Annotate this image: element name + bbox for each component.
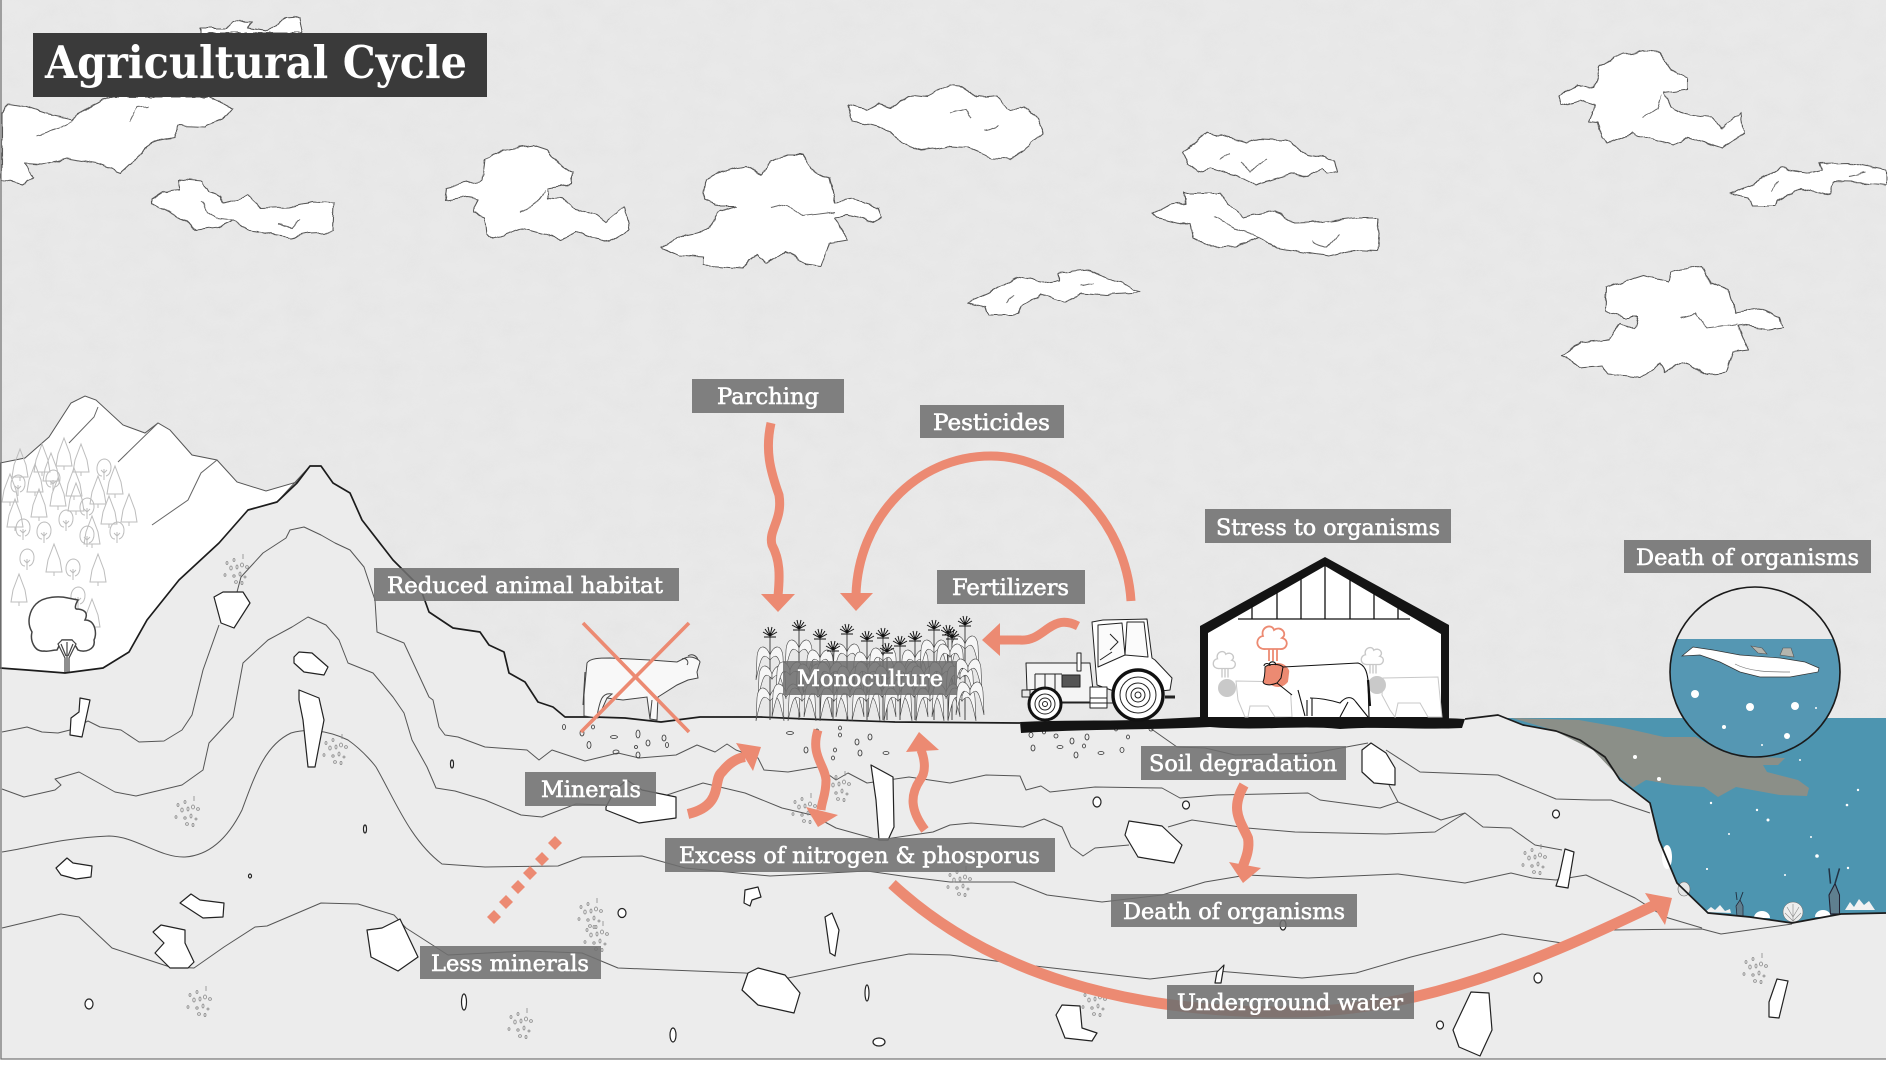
label: less minerals [420, 946, 601, 979]
cow in field [583, 655, 700, 720]
label: monoculture [783, 661, 957, 695]
mineral speckle clusters [175, 554, 1767, 1039]
seabed organisms [1662, 845, 1875, 922]
arrow: nitrogen leaching down [806, 730, 838, 827]
label: death of organisms in the sea [1624, 540, 1871, 573]
label: reduced animal habitat: Reduced animal habitat [387, 574, 663, 599]
rocks [56, 592, 1788, 1056]
label: monoculture: Monoculture [797, 667, 943, 692]
label: less minerals: Less minerals [431, 952, 589, 977]
arrow: fertilizers [982, 622, 1078, 656]
label: excess of nitrogen and phosphorus: Excess of nitrogen & phosporus [679, 844, 1040, 869]
label: parching: Parching [717, 385, 819, 410]
arrow: underground water [892, 884, 1672, 1012]
label: fertilizers: Fertilizers [952, 576, 1069, 601]
inset circle: dead fish in the water [1670, 587, 1840, 758]
barn and tractor foundation [1020, 717, 1465, 733]
arrow: parching [761, 423, 795, 612]
stressed cow [1263, 662, 1370, 717]
label: soil degradation [1141, 746, 1346, 780]
stress steam [1257, 626, 1287, 661]
ground line [0, 466, 1886, 923]
tractor [1022, 619, 1175, 720]
white mountains with forest [0, 396, 310, 673]
label: pesticides: Pesticides [933, 411, 1050, 436]
big tree [29, 597, 95, 673]
faded cows and steam [1213, 648, 1442, 717]
label: stress to organisms: Stress to organisms [1216, 516, 1440, 541]
fish [1682, 646, 1819, 677]
label: soil degradation: Soil degradation [1149, 752, 1337, 777]
clouds [2, 17, 1886, 378]
label: fertilizers [937, 570, 1085, 604]
conifer trees [2, 438, 137, 631]
label: pesticides [920, 405, 1064, 438]
crossed-out mark [581, 623, 689, 732]
sea water [1505, 718, 1886, 923]
label: excess of nitrogen and phosphorus [665, 838, 1055, 872]
label: stress to organisms [1205, 509, 1451, 543]
label: underground water: Underground water [1177, 991, 1403, 1016]
dashed line: less minerals [487, 836, 562, 924]
label: reduced animal habitat [374, 568, 679, 601]
monoculture crop [756, 616, 984, 721]
label: death of organisms in the sea: Death of organisms [1636, 546, 1859, 571]
water particles [1633, 731, 1859, 876]
label: parching [692, 379, 844, 413]
label: death of organisms in the soil: Death of organisms [1123, 900, 1345, 925]
arrow: minerals to crops [688, 743, 761, 814]
label: death of organisms in the soil [1111, 894, 1357, 927]
label: minerals [525, 772, 656, 806]
soil ground [0, 466, 1886, 1059]
arrow: soil degradation [1229, 785, 1261, 883]
barn [1200, 557, 1449, 722]
label: minerals: Minerals [541, 778, 641, 803]
arrow: nutrients up [906, 732, 939, 830]
label: underground water [1167, 985, 1414, 1019]
title: Agricultural Cycle [44, 36, 467, 89]
soil pebbles [562, 724, 1153, 760]
strata lines [2, 527, 1792, 979]
bubbles [1691, 690, 1817, 746]
crop leaves [756, 636, 984, 721]
arrow: pesticides [840, 456, 1131, 611]
polluted plume [1512, 718, 1809, 797]
